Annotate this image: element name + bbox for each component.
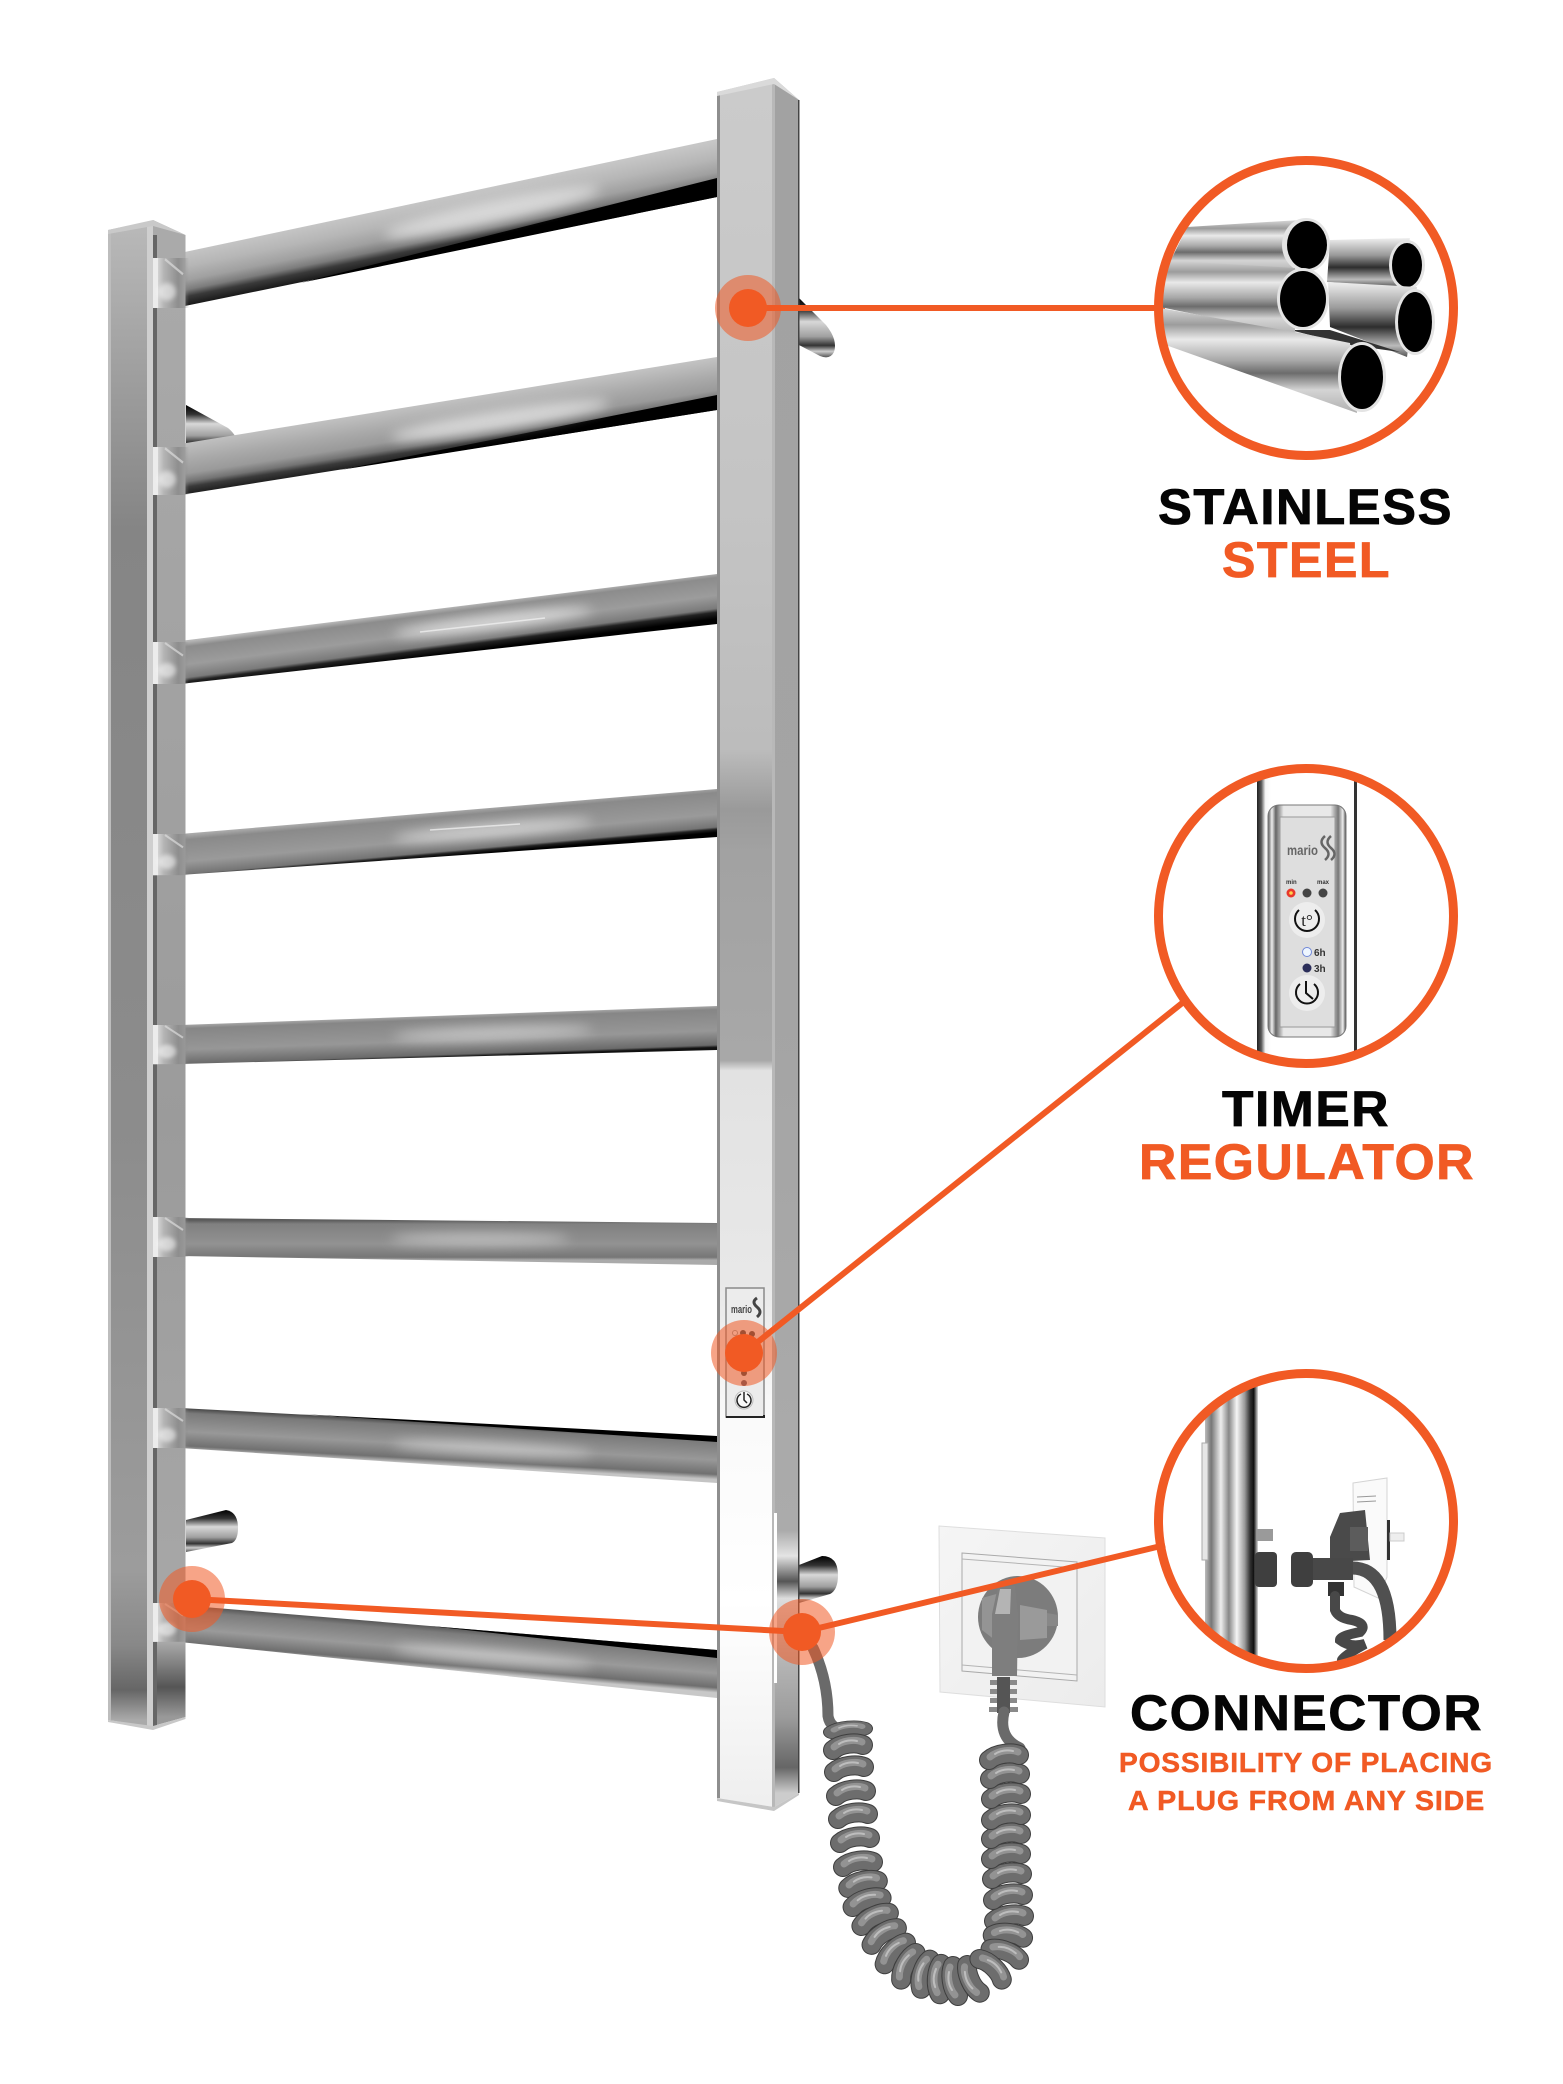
strain relief	[990, 1680, 1017, 1685]
description: A PLUG FROM ANY SIDE	[1128, 1785, 1485, 1816]
ring	[1158, 160, 1454, 456]
panel: stainless steel callout	[1158, 160, 1454, 588]
marker: stainless steel	[715, 275, 781, 341]
towel rail product	[108, 78, 838, 1811]
panel: connector callout	[1119, 1370, 1493, 1816]
heading: STEEL	[1222, 532, 1391, 588]
icon: control panel: 3h	[1314, 964, 1326, 975]
left upright	[108, 220, 186, 1730]
panel: timer regulator callout	[1139, 760, 1475, 1190]
leader lines	[192, 308, 1186, 1632]
marker: timer regulator	[711, 1320, 777, 1386]
icon: connector close-up	[1202, 1370, 1404, 1670]
plug head	[978, 1576, 1058, 1658]
description: POSSIBILITY OF PLACING	[1119, 1747, 1493, 1778]
coiled power cord	[813, 1648, 1024, 1996]
icon: control panel: 6h	[1314, 948, 1326, 959]
crossbars	[180, 139, 717, 1698]
icon: control panel	[1257, 779, 1357, 1053]
marker: left connector	[159, 1566, 225, 1632]
small control panel on rail	[726, 1288, 764, 1417]
right upright	[717, 78, 800, 1811]
rear mounting pins	[186, 298, 838, 1603]
crossbar joints	[153, 258, 189, 1642]
icon: control panel: mario	[1287, 842, 1318, 858]
heading: TIMER	[1222, 1081, 1390, 1137]
heading: REGULATOR	[1139, 1134, 1475, 1190]
heading	[1139, 1081, 1475, 1190]
ring	[1158, 1374, 1454, 1668]
socket plate	[939, 1526, 1105, 1707]
description	[1119, 1747, 1493, 1816]
small control panel on rail: mario	[731, 1304, 752, 1316]
icon: control panel: max	[1317, 880, 1330, 886]
marker dots	[159, 275, 835, 1665]
heading: STAINLESS	[1158, 479, 1453, 535]
heading	[1158, 479, 1453, 588]
heading: CONNECTOR	[1130, 1685, 1483, 1741]
icon: control panel: min	[1286, 880, 1297, 886]
wall socket with plug	[939, 1526, 1105, 1713]
ring	[1158, 768, 1454, 1064]
icon: control panel: t°	[1301, 911, 1313, 930]
icon: steel tubes	[1160, 218, 1435, 413]
marker: right connector	[769, 1599, 835, 1665]
